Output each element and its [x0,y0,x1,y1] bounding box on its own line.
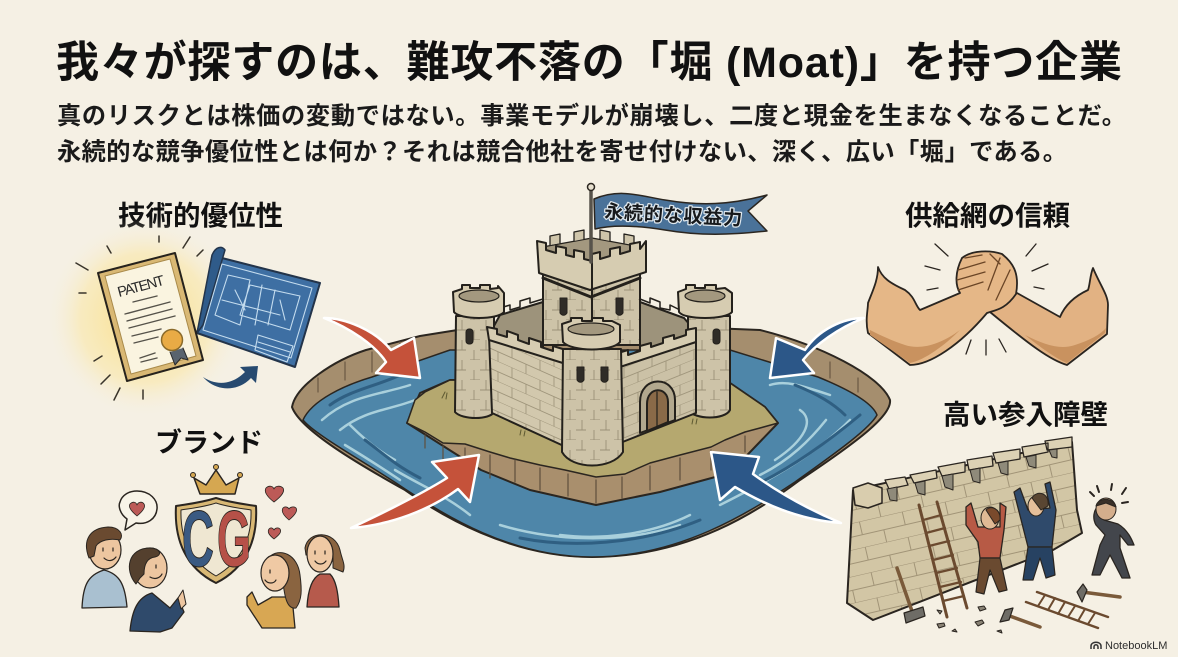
intro text [57,102,1126,166]
light rays [76,236,203,400]
brick wall [847,437,1082,620]
left wall [487,327,566,447]
central keep [537,230,646,345]
flag: durable earnings power: 永続的な収益力 [604,201,743,230]
flag: durable earnings power [588,184,767,262]
arrow: blue top [770,318,864,378]
muscle shading [870,328,1106,363]
intro text: 真のリスクとは株価の変動ではない。事業モデルが崩壊し、二度と現金を生まなくなることだ。 [57,102,1126,130]
shield: G [217,494,251,583]
blueprint [197,247,320,367]
right arm [990,268,1108,365]
arrow: blue bottom [711,452,841,523]
left tower [453,285,504,418]
front tower [562,318,623,466]
heading: barriers to entry: 高い参入障壁 [943,399,1108,430]
hammer on ground [897,568,925,623]
arrow: red top [324,318,420,378]
hammer 3 [1077,584,1120,602]
force lines [925,244,1048,355]
title: 我々が探すのは、難攻不落の「堀 (Moat)」を持つ企業 [56,39,1122,87]
moat [292,328,890,557]
arrow: red bottom [351,455,479,528]
back curtain walls [489,298,696,360]
hammer 2 [1000,608,1040,627]
heading: brand: ブランド [155,427,263,458]
patent certificate [98,253,203,381]
rubble [937,606,1002,633]
climber in blue [1014,482,1056,580]
shield: C [182,494,214,583]
person 4 [305,535,344,607]
island [407,380,778,505]
small curved arrow [203,366,258,388]
person 1 [82,527,127,608]
left arm [867,251,1017,365]
central illustration: moat and castle [292,184,890,557]
illustration: patent and blueprint [45,218,320,418]
illustration: wall with people and tools [847,437,1134,633]
glow [45,218,245,418]
person 3 [247,553,301,628]
fallen ladder [1026,592,1108,628]
worried man [1090,484,1134,578]
person 2 [129,548,186,632]
climber in red [966,503,1007,594]
illustration: brand [82,464,344,632]
patent certificate: PATENT [116,273,167,301]
illustration: arm wrestling [867,244,1108,365]
right tower [678,285,732,418]
knuckle lines [957,254,1010,300]
NotebookLM mark: NotebookLM [1105,640,1167,652]
crown [190,464,242,494]
heading: technology: 技術的優位性 [118,200,283,231]
speech bubble with heart [119,491,157,530]
hearts [265,486,297,539]
castle [453,230,732,466]
intro text: 永続的な競争優位性とは何か？それは競合他社を寄せ付けない、深く、広い「堀」である。 [57,139,1067,166]
right wall [618,328,696,443]
ladder [919,502,967,617]
heading: supply chain: 供給網の信頼 [905,200,1070,231]
gate [640,381,675,433]
